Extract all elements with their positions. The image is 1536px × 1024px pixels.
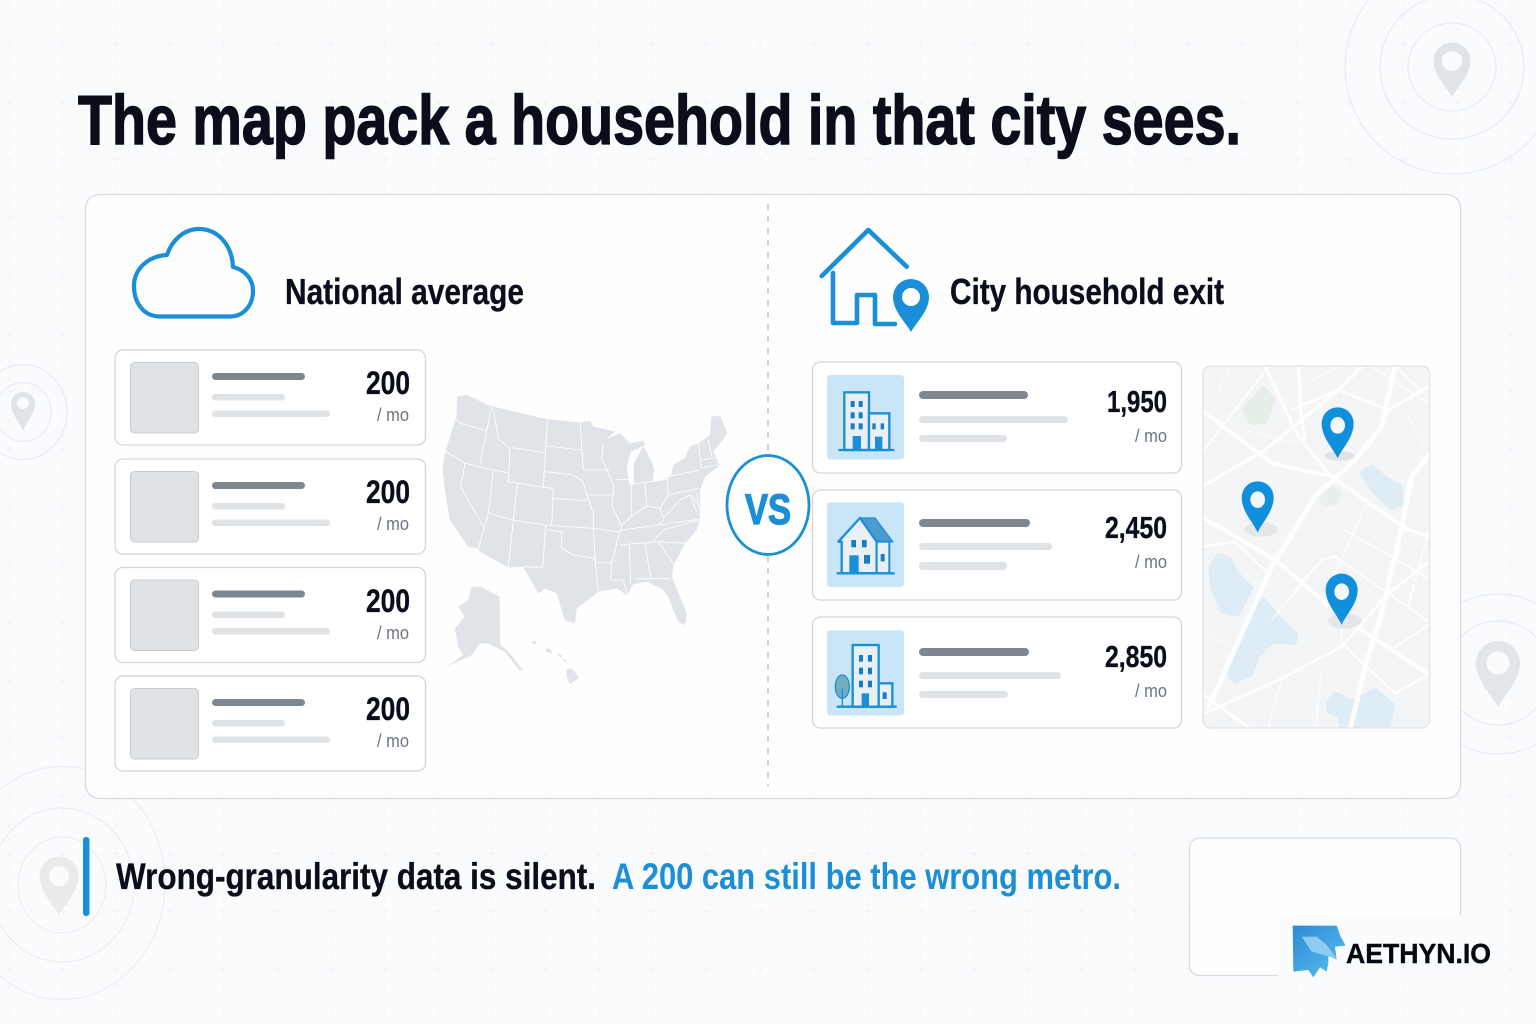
map card: city street map with pins [1202, 366, 1432, 730]
list row: national 2: / mo [377, 514, 409, 534]
map: United States [443, 395, 727, 684]
logo: Aethyn.io: AETHYN.IO [1346, 938, 1491, 969]
icon: office buildings [827, 375, 904, 460]
list row: national 4: 200 [366, 691, 410, 727]
heading: national average: National average [285, 271, 524, 312]
VS badge [727, 456, 809, 554]
list row: national 3 [115, 568, 426, 662]
icon: house with pin [822, 230, 929, 332]
list row: city 2,450: 2,450 [1105, 510, 1167, 545]
list row: national 2: 200 [366, 474, 410, 510]
list row: national 1: / mo [377, 405, 409, 425]
list row: national 3: / mo [377, 623, 409, 643]
VS badge: VS [745, 486, 791, 534]
panel: comparison card [86, 194, 1460, 798]
list row: national 2 [115, 459, 426, 554]
list row: city 1,950: 1,950 [1107, 384, 1167, 419]
list row: national 3: 200 [366, 583, 410, 619]
icon: cloud [134, 229, 253, 316]
pin 1 [1322, 407, 1355, 461]
list row: national 4: / mo [377, 731, 409, 751]
list row: national 4 [115, 676, 426, 771]
pin 3 [1326, 574, 1361, 629]
empty note card [1190, 838, 1460, 976]
list row: city 1,950 [812, 362, 1182, 473]
background: location rings top right [1345, 0, 1536, 174]
callout text: wrong granularity: Wrong-granularity data is silent. [116, 856, 596, 897]
list row: national 1 [115, 350, 426, 445]
callout text: wrong metro: A 200 can still be the wrong metro. [612, 856, 1121, 897]
background: location rings right [1418, 594, 1536, 754]
list row: city 2,450 [812, 490, 1182, 600]
list row: city 2,850 [812, 617, 1182, 728]
title: The map pack a household in that city sees. [78, 81, 1241, 159]
logo: Aethyn.io [1278, 915, 1506, 979]
background: location rings bottom left [0, 766, 165, 1000]
list row: city 2,850: / mo [1135, 681, 1167, 701]
list row: national 1: 200 [366, 365, 410, 401]
list row: city 2,850: 2,850 [1105, 639, 1167, 674]
accent bar [83, 837, 90, 916]
list row: city 1,950: / mo [1135, 426, 1167, 446]
background: location rings left [0, 364, 67, 460]
icon: building with tree [827, 630, 904, 716]
list row: city 2,450: / mo [1135, 552, 1167, 572]
icon: house [827, 502, 904, 587]
pin 2 [1242, 481, 1278, 537]
heading: city household exit: City household exit [950, 271, 1224, 312]
